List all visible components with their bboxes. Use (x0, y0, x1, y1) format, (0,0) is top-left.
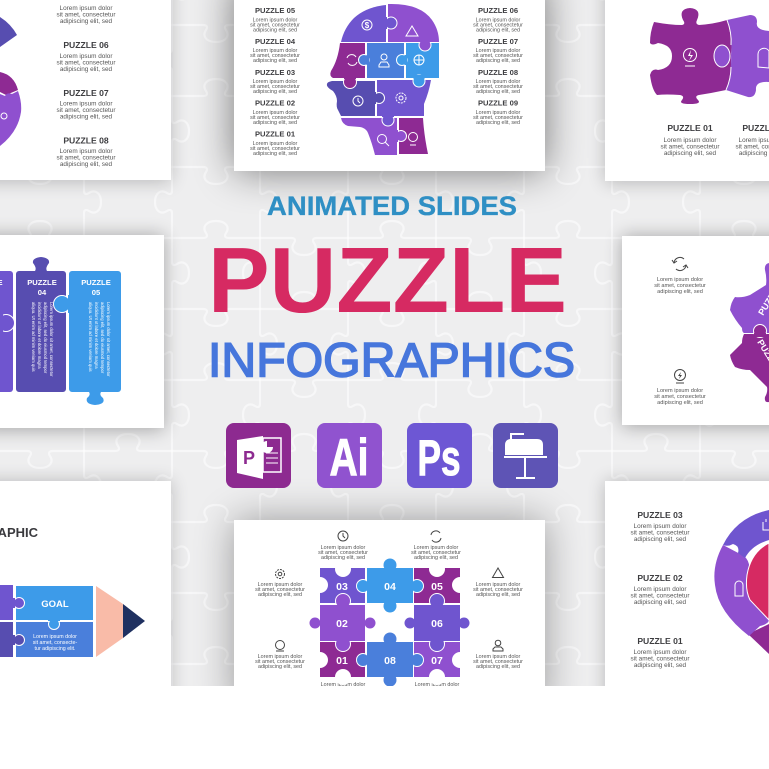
left text list: Lorem ipsum dolor (253, 110, 298, 116)
gear puzzle upper (730, 263, 769, 333)
piece: dollar (341, 5, 397, 42)
piece 02 (310, 594, 376, 652)
piece: dollar: $ (365, 21, 370, 30)
note: bolt (255, 640, 305, 670)
note: refresh: sit amet, consectetur (411, 550, 461, 556)
left text list: Lorem ipsum dolor (253, 141, 298, 147)
panel: middle-left slide (0, 235, 164, 428)
title: INFOGRAPHICS: INFOGRAPHICS (208, 334, 575, 388)
left text list: adipiscing elit, sed (253, 120, 297, 126)
title: PUZZLE: PUZZLE (208, 228, 567, 332)
piece 06: 06 (431, 618, 443, 630)
panel: top-right slide (605, 0, 769, 181)
text list: PUZZLE 06 (63, 40, 109, 50)
piece 01: 01 (336, 655, 348, 667)
left pieces (0, 585, 24, 657)
piece 05: adipiscing elit, sed do eiusmod tempor (100, 302, 105, 374)
note: person: adipiscing elit, sed (476, 664, 520, 670)
left text list: adipiscing elit, sed (253, 89, 297, 95)
text list: Lorem ipsum dolor (634, 649, 687, 656)
text columns: PUZZLE 01 (667, 123, 713, 133)
text: bolt note: Lorem ipsum dolor (657, 388, 703, 394)
right text list: adipiscing elit, sed (476, 89, 520, 95)
right text list: sit amet, consectetur (473, 84, 523, 90)
note: cut-off text: Lorem ipsum dolor (321, 682, 366, 688)
note piece: tur adipiscing elit. (35, 646, 75, 652)
text: bolt note: adipiscing elit, sed (657, 400, 703, 406)
right text list (473, 6, 523, 126)
piece 05: 05 (431, 581, 443, 593)
pencil puzzle (0, 585, 145, 657)
left text list: sit amet, consectetur (250, 53, 300, 59)
puzzle piece light purple (714, 15, 769, 97)
right text list: Lorem ipsum dolor (476, 79, 521, 85)
note: clock: Lorem ipsum dolor (321, 545, 366, 551)
piece 06 (404, 594, 470, 652)
note: bolt: adipiscing elit, sed (258, 664, 302, 670)
icons (735, 519, 769, 596)
text list: sit amet, consectetur (57, 12, 116, 18)
left text list: Lorem ipsum dolor (253, 18, 298, 24)
text list: sit amet, consectetur (57, 154, 116, 162)
right text list: PUZZLE 09 (478, 98, 518, 108)
puzzle piece magenta (650, 8, 732, 104)
right text list: PUZZLE 08 (478, 68, 518, 77)
note piece: sit amet, consecte- (33, 640, 77, 646)
note: bolt: sit amet, consectetur (255, 659, 305, 665)
text list: adipiscing elit, sed (60, 161, 113, 168)
note: gear (255, 570, 305, 598)
piece 04: aliqua. Ut enim ad minim veniam quis (31, 302, 36, 372)
right text list: adipiscing elit, sed (476, 58, 520, 64)
piece 05: aliqua. Ut enim ad minim veniam quis (88, 302, 93, 372)
right text list: Lorem ipsum dolor (476, 18, 521, 24)
left text list: PUZZLE 01 (255, 130, 296, 138)
piece 05: Lorem ipsum dolor sit amet, consectetur (106, 302, 111, 377)
text columns: adipiscing elit, sed (664, 150, 717, 157)
text list: adipiscing elit, sed (634, 536, 687, 543)
text list: PUZZLE 08 (63, 136, 109, 146)
right text list: sit amet, consectetur (473, 115, 523, 121)
text list: Lorem ipsum dolor (60, 148, 113, 155)
note: person: Lorem ipsum dolor (476, 654, 521, 660)
icon: Photoshop (407, 423, 472, 488)
panel: bottom-left slide (0, 481, 171, 686)
text: refresh note (654, 277, 706, 295)
piece 05 (414, 561, 468, 603)
pencil tip wood (96, 586, 123, 657)
goal piece: GOAL (41, 599, 69, 610)
goal piece (16, 586, 93, 620)
left text list: sit amet, consectetur (250, 22, 300, 28)
left text list: sit amet, consectetur (250, 115, 300, 121)
left text list: sit amet, consectetur (250, 146, 300, 152)
text list: sit amet, consectetur (631, 656, 690, 662)
icon: Keynote (493, 423, 558, 488)
piece 04: 04 (38, 288, 47, 297)
text list: adipiscing elit, sed (60, 66, 113, 73)
note: refresh: Lorem ipsum dolor (414, 545, 459, 551)
text: refresh note: Lorem ipsum dolor (657, 277, 703, 283)
left text list: Lorem ipsum dolor (253, 79, 298, 85)
note: person: sit amet, consectetur (473, 659, 523, 665)
inner drop (746, 543, 769, 620)
text list: Lorem ipsum dolor (60, 5, 113, 12)
note: clock: adipiscing elit, sed (321, 555, 365, 561)
text columns: Lorem ipsum dolor (664, 137, 717, 144)
panel: bottom-right slide (605, 481, 769, 686)
left text list: sit amet, consectetur (250, 84, 300, 90)
note piece: Lorem ipsum dolor (33, 634, 77, 640)
piece 03 (312, 561, 365, 603)
head puzzle (327, 4, 439, 155)
note: gear: adipiscing elit, sed (258, 592, 302, 598)
piece: magenta neck (399, 118, 428, 154)
text list: PUZZLE 01 (637, 636, 683, 646)
icon: bolt (674, 370, 686, 383)
ring top (723, 510, 769, 558)
piece: light blue (406, 38, 439, 78)
icon: Illustrator: Ai (330, 429, 368, 487)
left text list: adipiscing elit, sed (253, 58, 297, 64)
teardrop puzzle (714, 510, 769, 654)
piece 04: 04 (384, 581, 396, 593)
icon: Photoshop: Ps (418, 430, 460, 486)
icon: PowerPoint (226, 423, 291, 488)
text columns (661, 123, 769, 157)
piece 01 (312, 642, 365, 685)
piece 04: incididunt ut labore et dolore magna (37, 302, 42, 369)
text list: sit amet, consectetur (631, 530, 690, 536)
note piece (16, 618, 93, 657)
text list: sit amet, consectetur (57, 107, 116, 114)
left text list (250, 6, 300, 157)
text list: adipiscing elit, sed (60, 18, 113, 25)
piece 05: incididunt ut labore et dolore magna (94, 302, 99, 369)
text list (631, 510, 690, 669)
subtitle: ANIMATED SLIDES (267, 191, 517, 221)
piece 04 (0, 257, 66, 392)
note: bolt: Lorem ipsum dolor (258, 654, 303, 660)
left text list: Lorem ipsum dolor (253, 48, 298, 54)
left text list: PUZZLE 05 (255, 6, 296, 15)
note: warning: Lorem ipsum dolor (476, 582, 521, 588)
text list: Lorem ipsum dolor (634, 586, 687, 593)
piece 04: adipiscing elit, sed do eiusmod tempor (43, 302, 48, 374)
text list: adipiscing elit, sed (634, 599, 687, 606)
panel: top-center head slide (234, 0, 545, 171)
gear puzzle lower (730, 324, 769, 402)
right text list: sit amet, consectetur (473, 22, 523, 28)
piece 05: PUZZLE (81, 278, 111, 287)
text list: Lorem ipsum dolor (60, 100, 113, 108)
right text list: Lorem ipsum dolor (476, 110, 521, 116)
note: refresh: adipiscing elit, sed (414, 555, 458, 561)
text list: PUZZLE 02 (637, 573, 683, 583)
text: bolt note: sit amet, consectetur (654, 394, 706, 400)
text list: PUZZLE 03 (637, 510, 683, 520)
right text list: PUZZLE 06 (478, 6, 518, 15)
note: gear: sit amet, consectetur (255, 587, 305, 593)
piece 03: 03 (336, 581, 348, 593)
note: cut-off text (321, 682, 460, 688)
piece: magenta face (330, 43, 370, 78)
right text list: adipiscing elit, sed (476, 28, 520, 34)
wheel fragment top (0, 17, 17, 47)
text list: PUZZLE 07 (63, 88, 109, 98)
text list: sit amet, consectetur (57, 60, 116, 66)
note: warning (473, 568, 523, 598)
piece 03 (0, 271, 13, 392)
note: clock (318, 531, 368, 561)
text: refresh note: sit amet, consectetur (654, 283, 706, 289)
pencil tip lead (123, 604, 145, 638)
icon: PowerPoint: P (243, 448, 255, 468)
text list: adipiscing elit, sed (634, 662, 687, 669)
piece 07 (414, 642, 468, 685)
left text list: PUZZLE 04 (255, 37, 296, 46)
piece 04: PUZZLE (27, 278, 57, 287)
piece: gear (377, 75, 431, 116)
ring left (714, 545, 769, 636)
icon: refresh (672, 257, 688, 271)
note: refresh (411, 531, 461, 561)
left text list: adipiscing elit, sed (253, 28, 297, 34)
piece: clock nose (327, 75, 384, 116)
piece 02: 02 (336, 618, 348, 630)
text list: adipiscing elit, sed (60, 114, 113, 120)
note: clock: sit amet, consectetur (318, 550, 368, 556)
note: cut-off text: Lorem ipsum dolor (415, 682, 460, 688)
text list: Lorem ipsum dolor (634, 523, 687, 530)
wheel fragment bottom (0, 72, 21, 146)
left text list: PUZZLE 02 (255, 98, 295, 108)
text columns: sit amet, consectetur (661, 144, 720, 150)
piece 05 (54, 271, 121, 405)
right text list: sit amet, consectetur (473, 53, 523, 59)
piece 08: 08 (384, 655, 396, 667)
piece 07: 07 (431, 655, 443, 667)
text: refresh note: adipiscing elit, sed (657, 289, 703, 295)
right text list: PUZZLE 07 (478, 37, 518, 46)
text list (57, 5, 116, 168)
piece: blue person (367, 43, 408, 78)
panel: middle-right slide (622, 236, 769, 425)
piece 08 (356, 632, 424, 686)
piece 04 (356, 558, 424, 612)
ring bottom (748, 624, 769, 654)
right text list: adipiscing elit, sed (476, 120, 520, 126)
text list: sit amet, consectetur (631, 592, 690, 600)
text: bolt note (654, 388, 706, 406)
note: person (473, 640, 523, 670)
panel: bottom-center slide (234, 520, 545, 688)
note: warning: sit amet, consectetur (473, 587, 523, 593)
note: gear: Lorem ipsum dolor (258, 582, 303, 588)
left text list: PUZZLE 03 (255, 68, 295, 77)
left text list: adipiscing elit, sed (253, 151, 297, 157)
piece: search neck (341, 113, 406, 155)
piece: warning (388, 4, 439, 42)
piece 04: Lorem ipsum dolor sit amet, consectetur (49, 302, 54, 377)
panel: top-left slide (0, 0, 171, 180)
note: warning: adipiscing elit, sed (476, 592, 520, 598)
piece 05: 05 (92, 288, 101, 297)
text list: Lorem ipsum dolor (60, 53, 113, 60)
right text list: Lorem ipsum dolor (476, 48, 521, 54)
